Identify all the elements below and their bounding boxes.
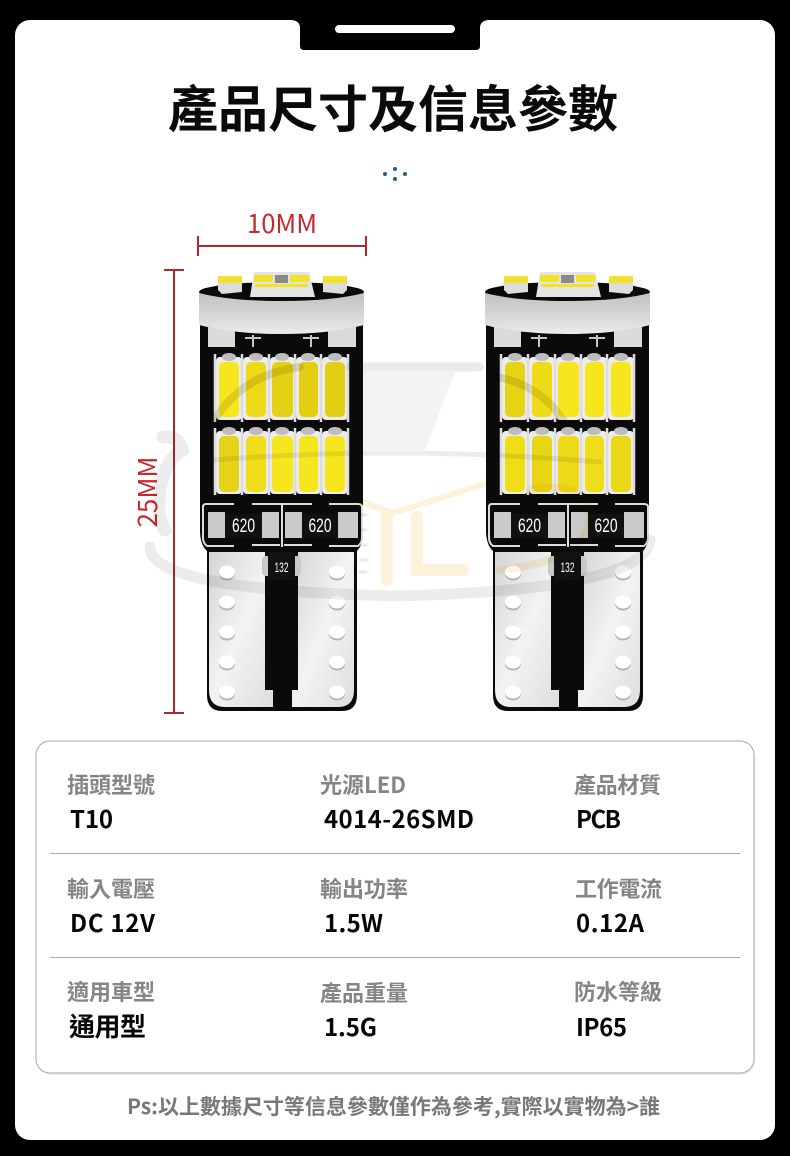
row 1 (67, 768, 661, 835)
width dimension: 10MM: 10MM (247, 204, 317, 241)
row 1: 插頭型號 (67, 768, 155, 800)
row 1: 光源LED (320, 768, 406, 800)
bulb: right (485, 272, 650, 711)
bulb: right: 132 (560, 559, 575, 575)
row 3 (67, 975, 662, 1044)
bulb: left: 620 (232, 516, 255, 537)
row 2: 1.5W (324, 904, 383, 939)
row 2: 輸入電壓 (67, 872, 155, 904)
title: 產品尺寸及信息參數 (168, 70, 618, 142)
bulb: right: 620 (594, 516, 618, 537)
watermark logo (150, 362, 650, 596)
width dimension: 10MM (198, 204, 366, 256)
row 3: 產品重量 (320, 976, 408, 1008)
row 2: 工作電流 (575, 872, 662, 904)
row 2: 輸出功率 (320, 872, 408, 904)
row 1: T10 (70, 800, 113, 835)
row 3: 1.5G (324, 1008, 377, 1043)
bulb: left: 620 (308, 516, 332, 537)
spec table (36, 741, 755, 1075)
decorative dots (383, 167, 407, 181)
row 2 (67, 872, 662, 939)
row 1: 產品材質 (574, 768, 661, 800)
bulb: left (199, 272, 364, 711)
row 3: IP65 (576, 1008, 627, 1043)
footnote: Ps:以上數據尺寸等信息參數僅作為參考,實際以實物為>誰 (127, 1091, 660, 1121)
row 1: PCB (576, 800, 621, 835)
row 3: 通用型 (69, 1007, 146, 1044)
bulb: right: 620 (518, 516, 541, 537)
bulb: left: 132 (274, 559, 289, 575)
top notch (292, 20, 488, 50)
row 2: DC 12V (70, 904, 155, 939)
row 2: 0.12A (576, 904, 645, 939)
height dimension: 25MM (128, 270, 184, 713)
height dimension: 25MM: 25MM (128, 456, 165, 528)
row 1: 4014-26SMD (324, 800, 474, 835)
row 3: 適用車型 (67, 975, 155, 1007)
row 3: 防水等級 (574, 975, 662, 1007)
